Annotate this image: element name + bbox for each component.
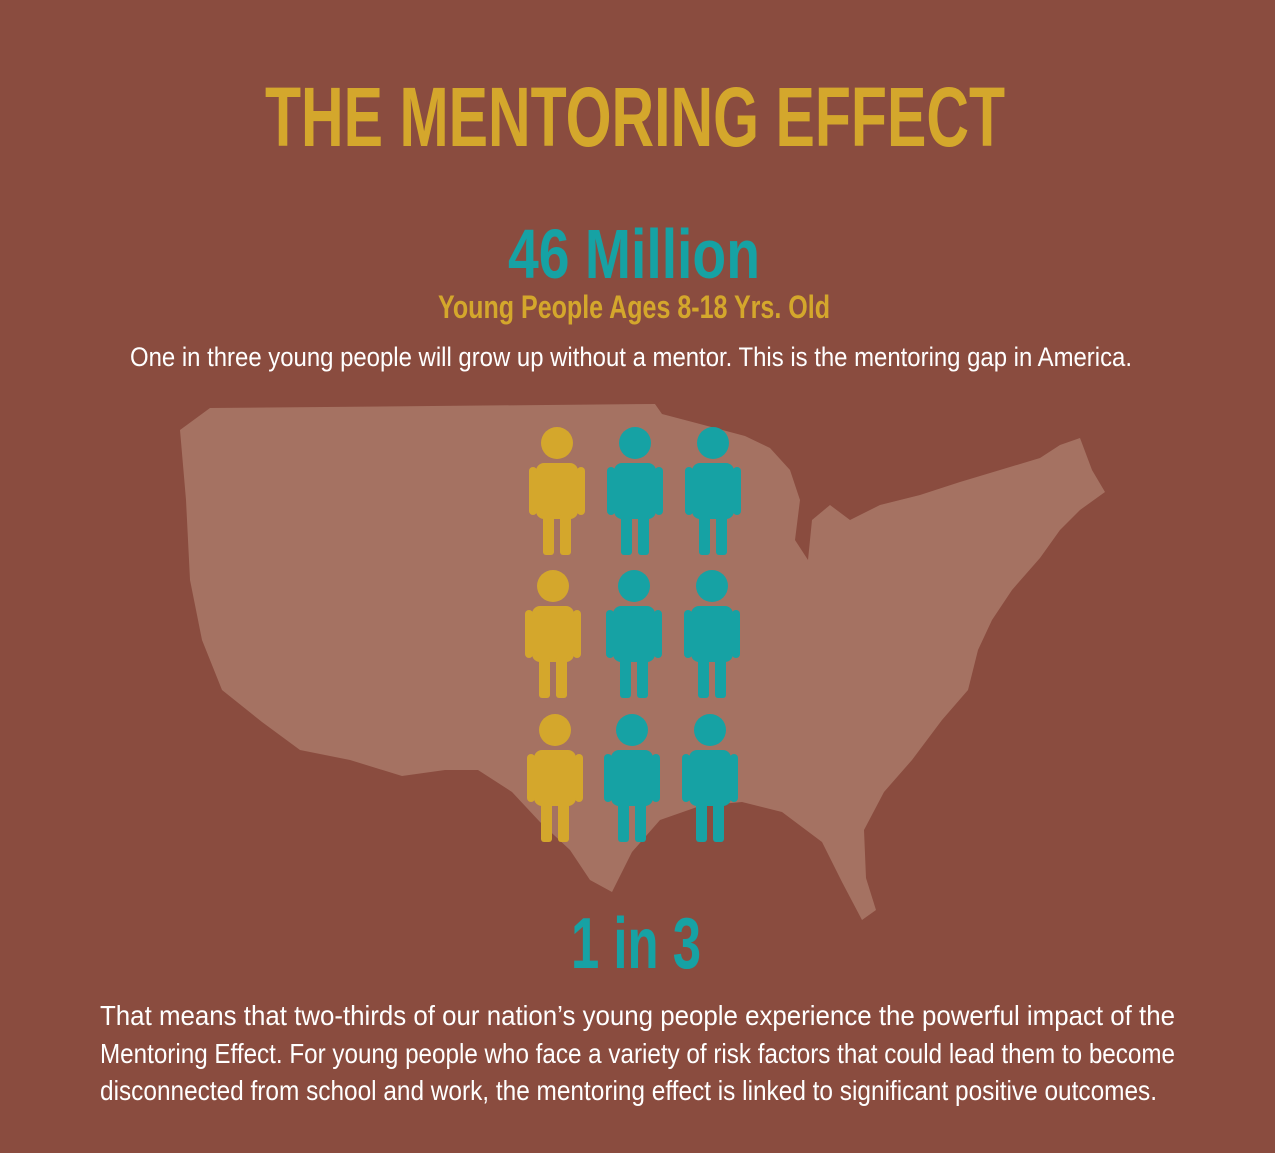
body paragraph: That means that two-thirds of our nation’s young people experience the powerful impact of the — [100, 1000, 1175, 1031]
map: united states — [180, 404, 1105, 920]
subheading: Young People Ages 8-18 Yrs. Old — [438, 289, 830, 325]
icons: people grid — [525, 427, 741, 842]
body paragraph — [100, 1000, 1175, 1106]
stat: 1 in 3: 1 in 3 — [571, 904, 701, 984]
intro text: One in three young people will grow up without a mentor. This is the mentoring gap in America. — [130, 342, 1132, 372]
stat: 46 million: 46 Million — [508, 215, 760, 293]
